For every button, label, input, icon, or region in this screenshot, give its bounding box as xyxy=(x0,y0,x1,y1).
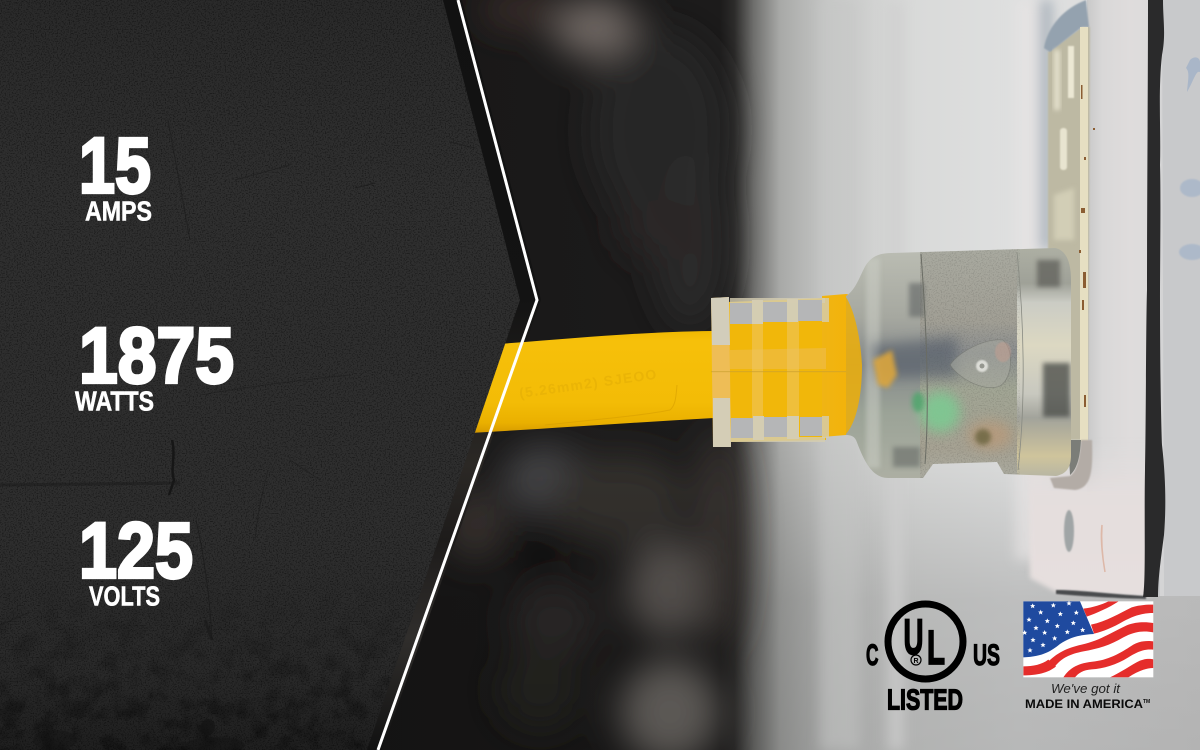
stat: 125 volts: 125 xyxy=(79,506,193,594)
yellow extension cord xyxy=(470,331,714,433)
dark gap between plate and wall xyxy=(1143,0,1165,597)
flag stars xyxy=(1022,601,1085,653)
outlet cover plate and wall xyxy=(1028,0,1200,599)
stat: 15 amps: 15 xyxy=(79,120,151,210)
soft vertical stripes on pale wall xyxy=(820,0,1052,750)
badge: cULus listed: US xyxy=(973,639,1000,672)
moulded cord lettering: (5.26mm2) SJEOO xyxy=(518,366,658,401)
grunge texture xyxy=(0,0,530,750)
badge: cULus listed: C xyxy=(866,639,878,672)
white chevron line xyxy=(378,0,537,750)
dark grunge panel xyxy=(0,0,530,750)
badge: cULus listed: LISTED xyxy=(887,684,963,716)
scratches xyxy=(0,120,475,640)
collar windows xyxy=(730,300,822,438)
clear plug head xyxy=(845,245,1072,485)
plug strain relief collar xyxy=(711,294,864,447)
badge: cULus listed: U xyxy=(904,609,924,665)
wall surface xyxy=(1156,0,1200,596)
badge: cULus listed: R xyxy=(914,658,919,665)
tagline: made in america: MADE IN AMERICA xyxy=(1025,699,1143,711)
plug internal reflections xyxy=(866,258,1070,468)
tagline: made in america: We've got it xyxy=(1051,681,1121,696)
badge: cULus listed xyxy=(866,604,1000,716)
stat: 1875 watts: WATTS xyxy=(75,386,154,416)
outlet opening rim below plug xyxy=(1050,440,1092,490)
grainy frosted texture xyxy=(920,245,1020,485)
screw xyxy=(1064,510,1074,552)
stat: 15 amps: AMPS xyxy=(85,196,152,226)
tagline: made in america: TM xyxy=(1143,699,1150,705)
plug rivet badge xyxy=(950,340,1011,388)
outlet plate upper section xyxy=(1087,0,1150,596)
collar ribs xyxy=(752,320,799,418)
outlet plate lower section xyxy=(1028,440,1150,599)
blurred bokeh shapes xyxy=(445,0,742,750)
collar flange xyxy=(711,297,731,447)
gold outlet face xyxy=(1044,0,1095,442)
stat: 125 volts: VOLTS xyxy=(89,580,160,612)
tagline: made in america xyxy=(1025,681,1150,711)
black band behind chevron xyxy=(360,0,541,750)
icon: american flag xyxy=(1022,601,1153,677)
stat: 1875 watts: 1875 xyxy=(79,310,234,400)
badge: cULus listed: L xyxy=(927,622,945,675)
